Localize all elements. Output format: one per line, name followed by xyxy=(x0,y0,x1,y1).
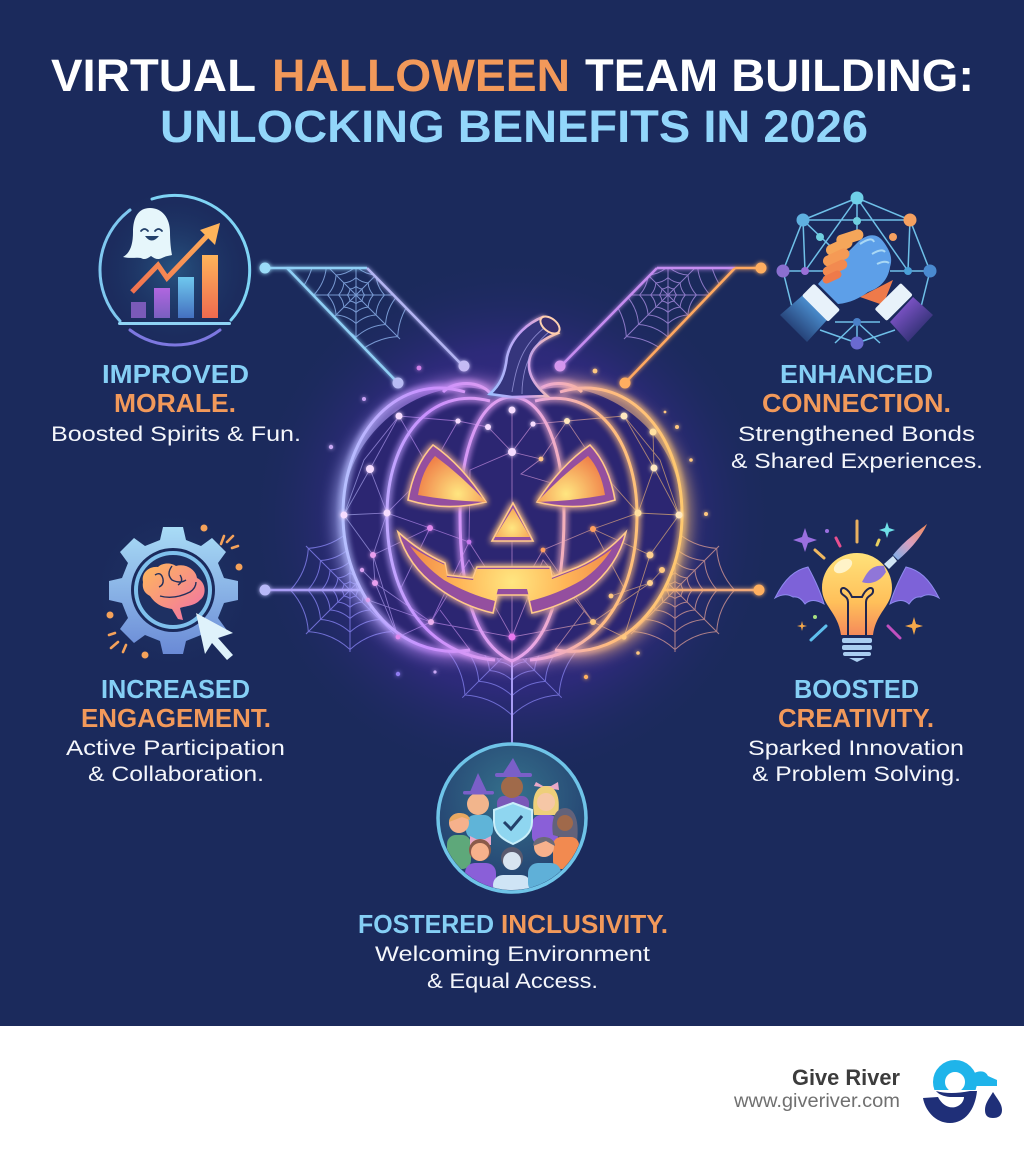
footer brand text: www.giveriver.com xyxy=(733,1091,900,1112)
text block: improved morale: Boosted Spirits & Fun. xyxy=(51,423,301,446)
text block: fostered inclusivity: INCLUSIVITY. xyxy=(501,909,668,939)
title: VIRTUAL xyxy=(51,50,256,101)
network nodes xyxy=(776,192,936,350)
text block: increased engagement: INCREASED xyxy=(101,674,250,704)
text block: boosted creativity: CREATIVITY. xyxy=(778,703,934,733)
handshake xyxy=(780,228,933,342)
icon: gear brain cursor xyxy=(88,505,258,675)
text block: fostered inclusivity xyxy=(358,909,668,993)
connector web: top left xyxy=(256,260,472,392)
text block: enhanced connection: ENHANCED xyxy=(780,359,933,389)
pumpkin stem xyxy=(490,313,563,397)
bat wings xyxy=(775,567,939,604)
icon: bulb with bat wings and brush xyxy=(775,521,939,662)
connector web: middle right xyxy=(613,528,764,652)
pumpkin left eye xyxy=(408,445,486,507)
stars and confetti xyxy=(793,521,923,640)
pumpkin nodes xyxy=(340,406,682,640)
pumpkin body xyxy=(343,388,682,659)
connector web: middle left xyxy=(260,528,412,652)
text block: increased engagement: Active Participation xyxy=(66,737,285,760)
text block: enhanced connection: CONNECTION. xyxy=(762,388,951,418)
pumpkin network lines xyxy=(344,410,679,660)
connector web: top right xyxy=(552,259,770,392)
text block: fostered inclusivity: Welcoming Environment xyxy=(375,943,650,966)
pumpkin mouth xyxy=(398,532,626,613)
text block: enhanced connection xyxy=(731,359,983,473)
gear xyxy=(109,527,238,654)
pumpkin nose xyxy=(492,503,533,541)
left man xyxy=(447,813,471,869)
connector web: bottom xyxy=(442,578,582,750)
brush xyxy=(862,524,927,583)
footer brand text xyxy=(733,1065,900,1112)
text block: improved morale: IMPROVED xyxy=(102,359,249,389)
witch center xyxy=(495,758,532,812)
middle person xyxy=(493,847,530,890)
bulb xyxy=(822,553,892,662)
title: HALLOWEEN xyxy=(272,50,570,101)
cursor xyxy=(196,613,233,660)
text block: boosted creativity: & Problem Solving. xyxy=(752,763,961,786)
brain xyxy=(143,564,205,620)
text block: enhanced connection: Strengthened Bonds xyxy=(738,423,975,446)
icon ring xyxy=(100,195,250,345)
ghost xyxy=(123,208,172,259)
sparks xyxy=(106,524,242,658)
pumpkin glow xyxy=(343,388,682,659)
text block: fostered inclusivity: & Equal Access. xyxy=(427,970,598,993)
icon: morale ghost and chart xyxy=(87,182,263,358)
text block: improved morale: MORALE. xyxy=(114,388,236,418)
text block: increased engagement xyxy=(66,674,285,786)
witch left xyxy=(463,773,494,839)
title xyxy=(51,50,974,152)
text block: boosted creativity: Sparked Innovation xyxy=(748,737,964,760)
people xyxy=(447,758,579,895)
pumpkin rib outlines xyxy=(343,383,682,661)
floating sparkles xyxy=(329,366,708,679)
chart bars xyxy=(118,255,231,325)
cat ear woman xyxy=(532,782,559,845)
text block: improved morale xyxy=(51,359,301,446)
text block: fostered inclusivity: FOSTERED xyxy=(358,909,494,939)
front woman xyxy=(465,836,496,893)
shield xyxy=(494,803,532,844)
text block: boosted creativity xyxy=(748,674,964,786)
icon: network handshake xyxy=(776,192,936,350)
footer brand text: Give River xyxy=(792,1065,900,1090)
text block: increased engagement: ENGAGEMENT. xyxy=(81,703,271,733)
text block: increased engagement: & Collaboration. xyxy=(88,763,264,786)
pumpkin xyxy=(340,313,682,661)
pumpkin right eye xyxy=(537,445,615,507)
logo: Give River xyxy=(923,1066,1002,1123)
text block: enhanced connection: & Shared Experiences. xyxy=(731,450,983,473)
title: UNLOCKING BENEFITS IN 2026 xyxy=(160,101,868,152)
trend arrow xyxy=(132,223,220,292)
icon: inclusive team xyxy=(436,742,588,894)
title: TEAM BUILDING: xyxy=(585,50,974,101)
text block: boosted creativity: BOOSTED xyxy=(794,674,919,704)
right man xyxy=(528,837,561,893)
network xyxy=(783,198,930,343)
far right woman xyxy=(552,808,579,869)
